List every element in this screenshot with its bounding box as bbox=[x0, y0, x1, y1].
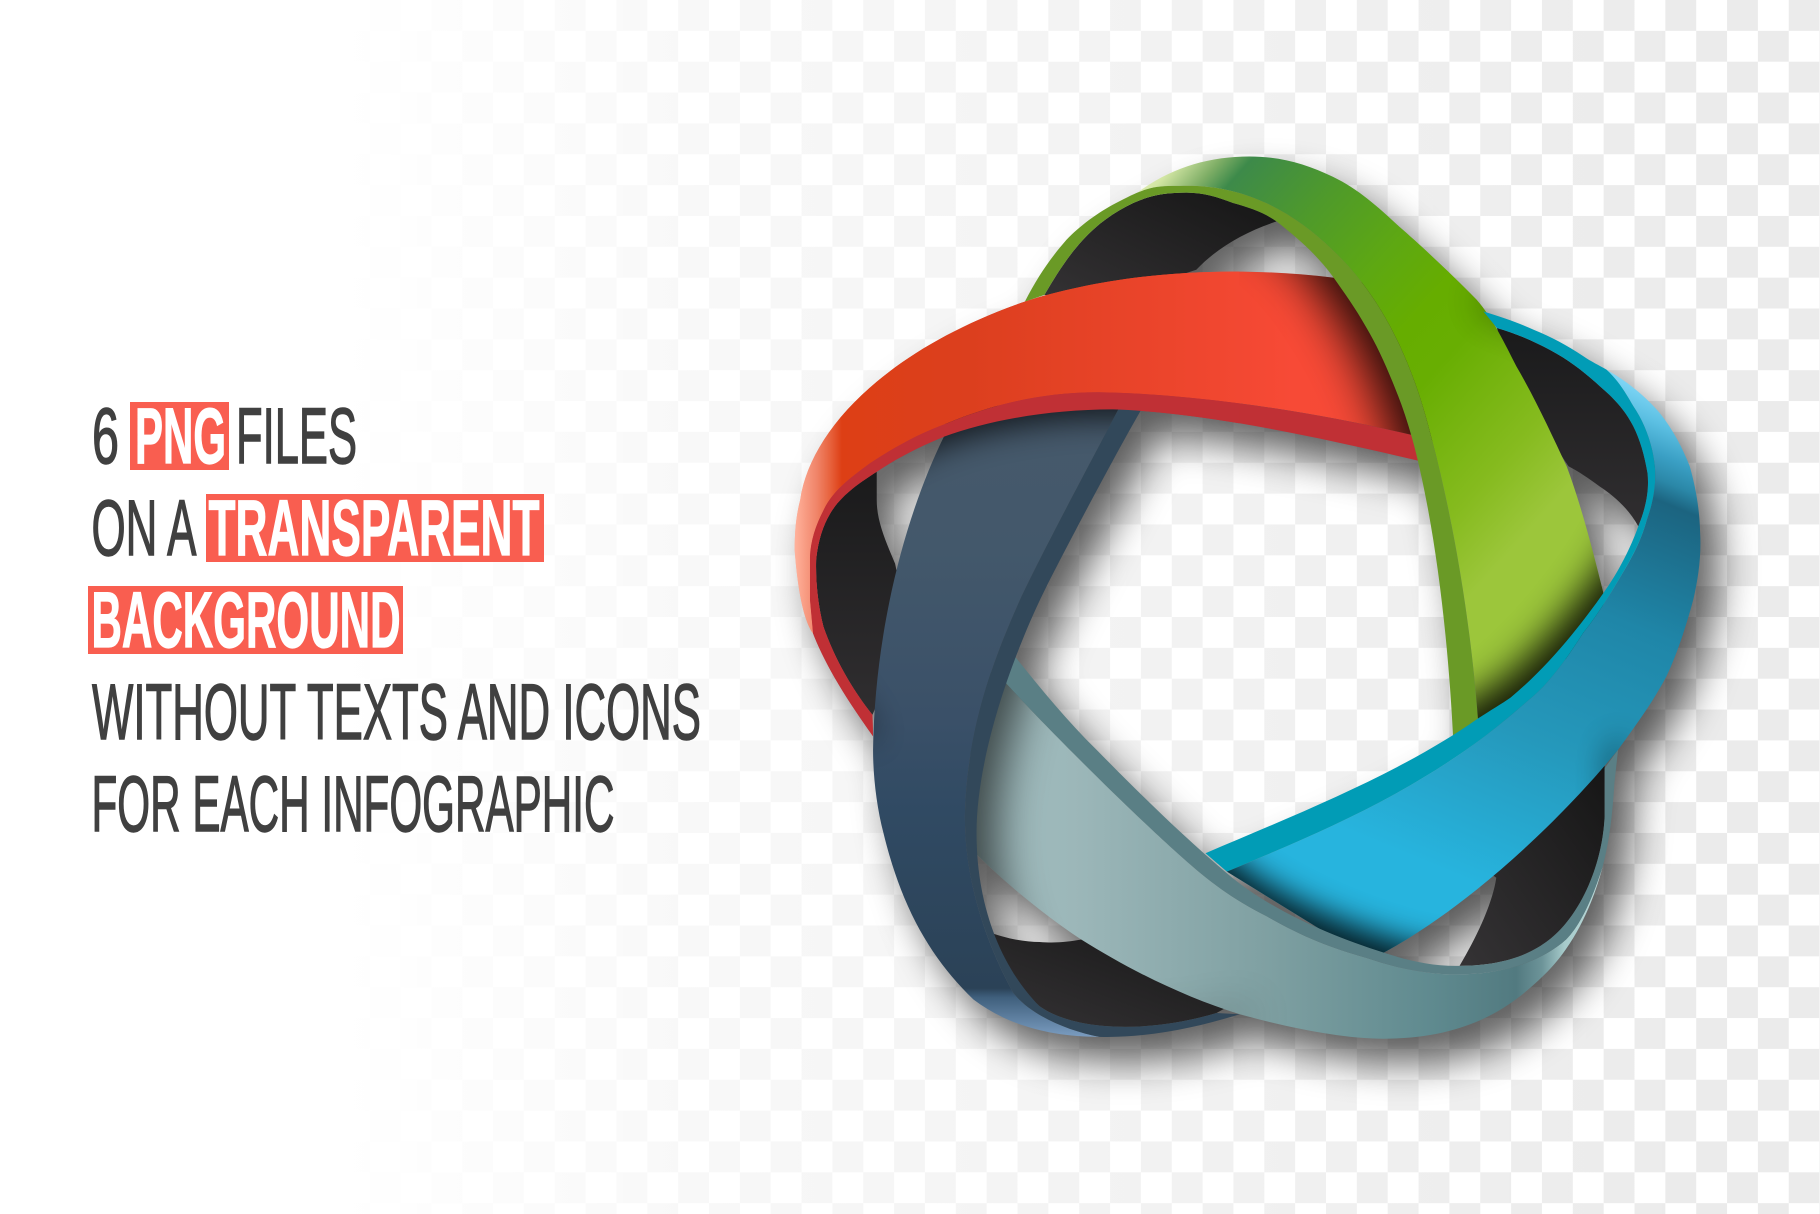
band: red bbox=[794, 272, 1432, 736]
interlocked five-band ribbon ring bbox=[795, 157, 1719, 1063]
line 1: 6 PNG FILES: PNG bbox=[135, 391, 226, 480]
band: navy bbox=[873, 406, 1240, 1037]
line 3: BACKGROUND: BACKGROUND bbox=[92, 575, 400, 664]
line 2: ON A TRANSPARENT: ON A bbox=[92, 483, 197, 572]
line 3: BACKGROUND bbox=[88, 575, 403, 664]
line 2: ON A TRANSPARENT bbox=[92, 483, 544, 572]
line 1: 6 PNG FILES bbox=[92, 391, 357, 480]
band: pale teal bbox=[976, 658, 1618, 1039]
band: red overlap over navy bbox=[794, 272, 1240, 736]
band: green bbox=[1025, 156, 1604, 736]
black inner backs of the bands bbox=[816, 193, 1648, 1027]
ring drop shadow bbox=[813, 181, 1719, 1063]
line 5: FOR EACH INFOGRAPHIC: FOR EACH INFOGRAPHIC bbox=[92, 759, 614, 848]
band: blue bbox=[1206, 312, 1700, 952]
line 4: WITHOUT TEXTS AND ICONS: WITHOUT TEXTS AND ICONS bbox=[92, 667, 701, 756]
line 1: 6 PNG FILES: 6 bbox=[92, 391, 119, 480]
line 1: 6 PNG FILES: FILES bbox=[236, 391, 357, 480]
line 2: ON A TRANSPARENT: TRANSPARENT bbox=[208, 483, 540, 572]
headline text block bbox=[88, 391, 701, 848]
